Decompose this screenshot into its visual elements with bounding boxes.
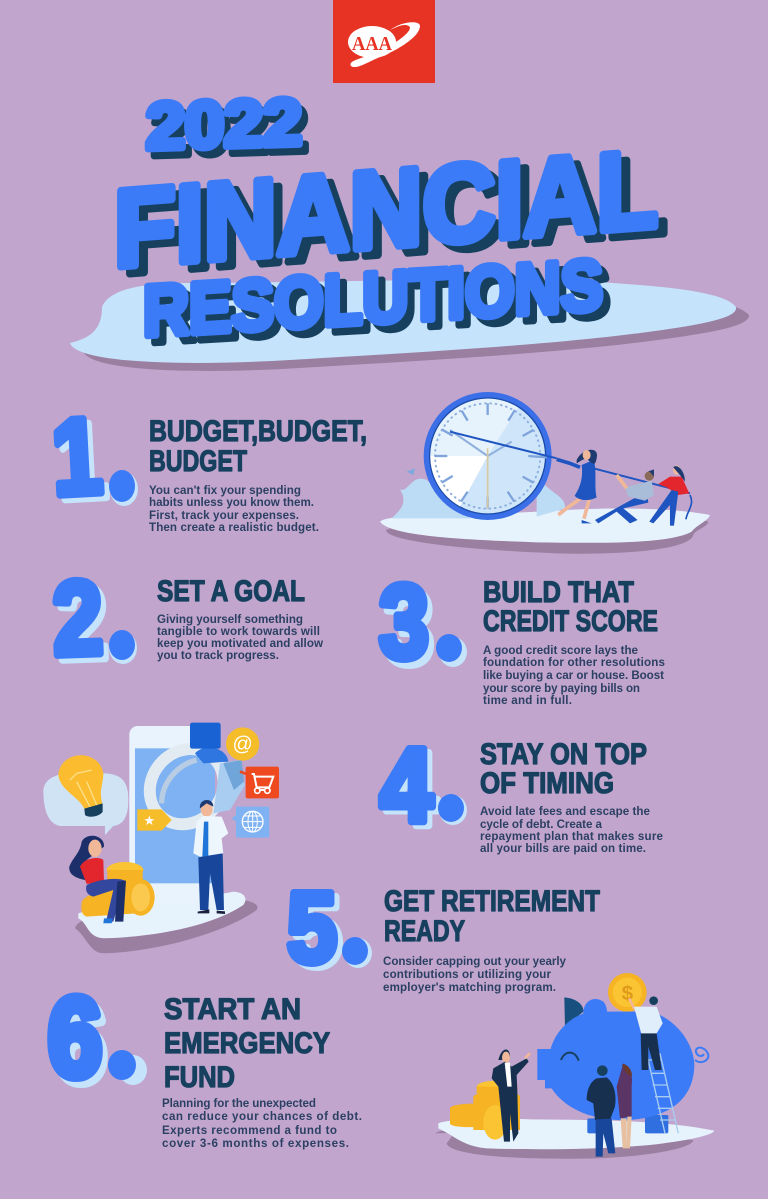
text block 3: credit score: foundation for other resolutions xyxy=(483,656,665,669)
text block 6: emergency fund: EMERGENCY xyxy=(164,1027,330,1060)
number 3: 3 xyxy=(384,570,434,687)
number 6: 6 xyxy=(53,981,107,1106)
text block 1: budget: habits unless you know them. xyxy=(149,496,314,509)
number 6 xyxy=(48,975,147,1106)
number 4 xyxy=(380,727,467,848)
number 6: 6 xyxy=(48,975,102,1100)
text block 5: retirement: Consider capping out your yearly xyxy=(383,955,567,968)
text block 3: credit score: time and in full. xyxy=(483,694,572,707)
text block 2: set a goal: SET A GOAL xyxy=(157,575,305,608)
text block 5: retirement: READY xyxy=(384,915,465,948)
text block 3: credit score: A good credit score lays the xyxy=(483,644,639,657)
number 2: 2 xyxy=(56,564,110,683)
illustration: phone, ideas and coins: ★ xyxy=(143,814,155,829)
title: FINANCIAL: FINANCIAL xyxy=(123,134,667,298)
number 5: 5 xyxy=(292,876,342,988)
text block 5: retirement xyxy=(383,885,600,994)
text block 2: set a goal: keep you motivated and allow xyxy=(157,637,324,650)
number 3 xyxy=(379,564,467,687)
text block 2: set a goal xyxy=(157,575,324,662)
logo: AAA: AAA xyxy=(352,33,393,55)
title: 2022: 2022 xyxy=(146,84,302,163)
text block 4: timing: OF TIMING xyxy=(480,767,614,800)
text block 1: budget: You can't fix your spending xyxy=(149,484,301,497)
text block 3: credit score: your score by paying bills on xyxy=(483,682,640,695)
text block 3: credit score xyxy=(483,576,665,707)
number 3: 3 xyxy=(379,564,429,681)
number 1: 1 xyxy=(49,394,105,518)
text block 6: emergency fund: Experts recommend a fund to xyxy=(162,1124,337,1137)
text block 6: emergency fund xyxy=(162,993,362,1150)
text block 6: emergency fund: Planning for the unexpected xyxy=(162,1097,316,1110)
title blob xyxy=(70,280,749,371)
text block 4: timing: Avoid late fees and escape the xyxy=(480,805,651,818)
number 5: 5 xyxy=(287,872,337,984)
text block 1: budget xyxy=(149,415,367,534)
text block 4: timing: cycle of debt. Create a xyxy=(480,818,603,831)
number 2: 2 xyxy=(51,559,105,678)
number 5 xyxy=(287,872,372,988)
text block 1: budget: BUDGET xyxy=(149,445,247,478)
title: 2022: 2022 xyxy=(152,91,308,170)
text block 6: emergency fund: can reduce your chances of debt. xyxy=(162,1110,362,1123)
illustration: phone, ideas and coins xyxy=(43,723,279,953)
text block 3: credit score: BUILD THAT xyxy=(483,576,634,609)
text block 5: retirement: contributions or utilizing your xyxy=(383,968,551,981)
text block 1: budget: BUDGET,BUDGET, xyxy=(149,415,367,448)
text block 5: retirement: GET RETIREMENT xyxy=(384,885,600,918)
illustration: phone, ideas and coins: @ xyxy=(232,734,253,756)
number 4: 4 xyxy=(380,727,433,844)
illustration: piggy bank xyxy=(435,973,714,1159)
text block 4: timing xyxy=(480,738,664,855)
number 2 xyxy=(51,559,137,683)
logo: AAA xyxy=(333,0,435,83)
text block 6: emergency fund: START AN xyxy=(164,993,301,1026)
text block 1: budget: First, track your expenses. xyxy=(149,509,299,522)
title: RESOLUTIONS: RESOLUTIONS xyxy=(143,245,603,352)
text block 4: timing: all your bills are paid on time. xyxy=(480,842,646,855)
text block 5: retirement: employer's matching program. xyxy=(383,981,556,994)
text block 2: set a goal: you to track progress. xyxy=(157,649,279,662)
text block 2: set a goal: tangible to work towards will xyxy=(157,625,320,638)
number 4: 4 xyxy=(385,731,438,848)
illustration: piggy bank: $ xyxy=(622,982,634,1005)
text block 2: set a goal: Giving yourself something xyxy=(157,613,303,626)
text block 6: emergency fund: FUND xyxy=(164,1061,235,1094)
illustration: tug of war with clock xyxy=(380,392,710,554)
title: RESOLUTIONS: RESOLUTIONS xyxy=(150,252,610,359)
title: FINANCIAL: FINANCIAL xyxy=(114,127,658,291)
text block 6: emergency fund: cover 3-6 months of expenses. xyxy=(162,1137,349,1150)
text block 4: timing: repayment plan that makes sure xyxy=(480,830,664,843)
text block 3: credit score: CREDIT SCORE xyxy=(483,605,658,638)
number 1: 1 xyxy=(54,399,110,523)
text block 3: credit score: like buying a car or house. Boost xyxy=(483,669,664,682)
text block 4: timing: STAY ON TOP xyxy=(480,738,647,771)
text block 1: budget: Then create a realistic budget. xyxy=(149,521,319,534)
